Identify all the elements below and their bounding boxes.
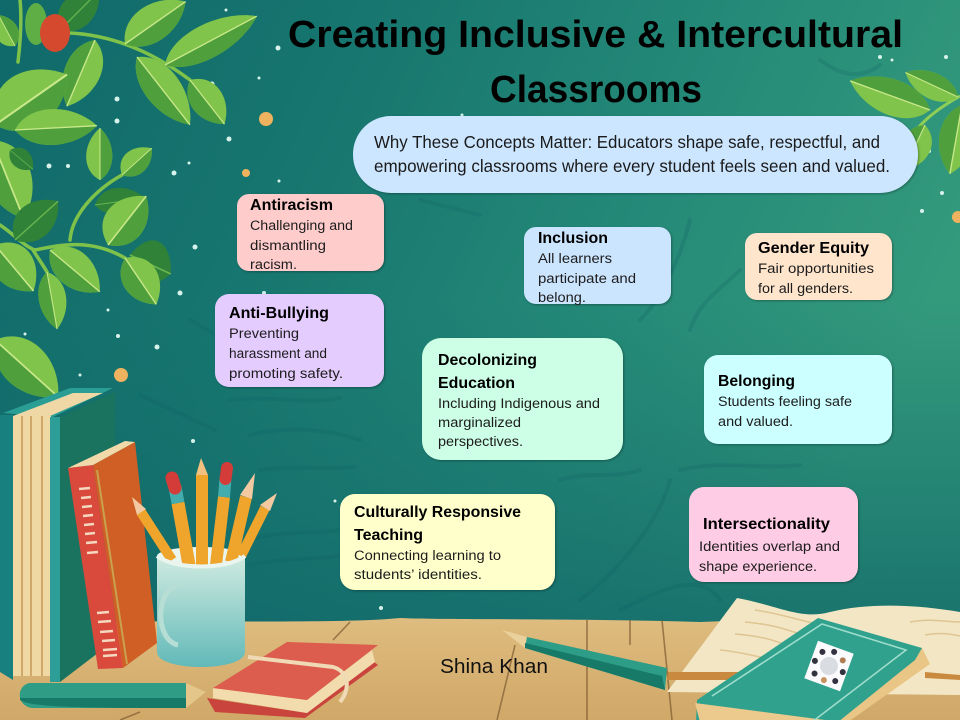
card: Belonging: Students feeling safe — [718, 394, 852, 409]
card: Decolonizing Education — [422, 338, 623, 460]
card: Culturally Responsive Teaching: students’ identities. — [354, 567, 482, 582]
card: Gender Equity: Fair opportunities — [758, 261, 874, 276]
card: Inclusion: Inclusion — [538, 230, 608, 247]
illustration: green pen on table — [20, 683, 206, 708]
card: Antiracism: Antiracism — [250, 197, 333, 214]
callout: why these concepts matter: empowering classrooms where every student feels seen and valued. — [374, 156, 890, 176]
card: Antiracism: dismantling — [250, 238, 326, 253]
illustration: red notebook — [207, 642, 378, 718]
card: Intersectionality: shape experience. — [699, 559, 817, 574]
card: Inclusion: participate and — [538, 271, 636, 286]
card: Anti-Bullying — [215, 294, 384, 387]
card: Anti-Bullying: promoting safety. — [229, 366, 343, 381]
card: Decolonizing Education: Decolonizing — [438, 352, 537, 369]
illustration: red and orange book — [68, 441, 157, 669]
card: Antiracism: racism. — [250, 257, 297, 272]
card: Inclusion: All learners — [538, 251, 612, 266]
card: Decolonizing Education: Education — [438, 375, 515, 392]
card: Antiracism — [237, 194, 384, 272]
card: Intersectionality: Intersectionality — [703, 516, 830, 533]
card: Gender Equity: Gender Equity — [758, 240, 869, 257]
card: Intersectionality: Identities overlap and — [699, 539, 840, 554]
card: Belonging — [704, 355, 892, 444]
card: Decolonizing Education: perspectives. — [438, 434, 523, 449]
card: Culturally Responsive Teaching — [340, 494, 555, 590]
illustration: pencils in a mug — [132, 458, 277, 667]
image: circle of diverse people — [804, 641, 854, 691]
card: Anti-Bullying: Anti-Bullying — [229, 305, 329, 322]
callout: why these concepts matter: Why These Concepts Matter: Educators shape safe, respectful, and — [374, 132, 880, 152]
callout: why these concepts matter — [353, 116, 918, 193]
title — [288, 14, 903, 111]
title: Creating Inclusive & Intercultural — [288, 14, 903, 56]
plant: right leaves — [844, 61, 960, 177]
card: Culturally Responsive Teaching: Culturally Responsive — [354, 504, 521, 521]
author name: Shina Khan — [440, 656, 548, 678]
icon: red berry — [40, 14, 70, 52]
card: Decolonizing Education: Including Indigenous and — [438, 396, 600, 411]
decorative orange dots — [114, 112, 960, 382]
title: Classrooms — [490, 69, 702, 111]
plant: left vine leaves — [0, 0, 264, 413]
card: Inclusion: belong. — [538, 290, 586, 305]
card: Belonging: Belonging — [718, 373, 795, 390]
card: Intersectionality — [689, 487, 858, 582]
card: Culturally Responsive Teaching: Teaching — [354, 527, 423, 544]
card: Belonging: and valued. — [718, 414, 793, 429]
card: Gender Equity — [745, 233, 892, 300]
card: Culturally Responsive Teaching: Connecting learning to — [354, 548, 501, 563]
card: Anti-Bullying: harassment and — [229, 346, 327, 361]
illustration: open book and green pencil — [502, 598, 960, 695]
illustration: large green book — [0, 388, 115, 682]
card: Antiracism: Challenging and — [250, 218, 353, 233]
illustration: green closed book — [695, 618, 930, 720]
card: Gender Equity: for all genders. — [758, 281, 853, 296]
wooden table — [0, 612, 960, 720]
card: Decolonizing Education: marginalized — [438, 415, 521, 430]
card: Anti-Bullying: Preventing — [229, 326, 299, 341]
card: Inclusion — [524, 227, 671, 305]
